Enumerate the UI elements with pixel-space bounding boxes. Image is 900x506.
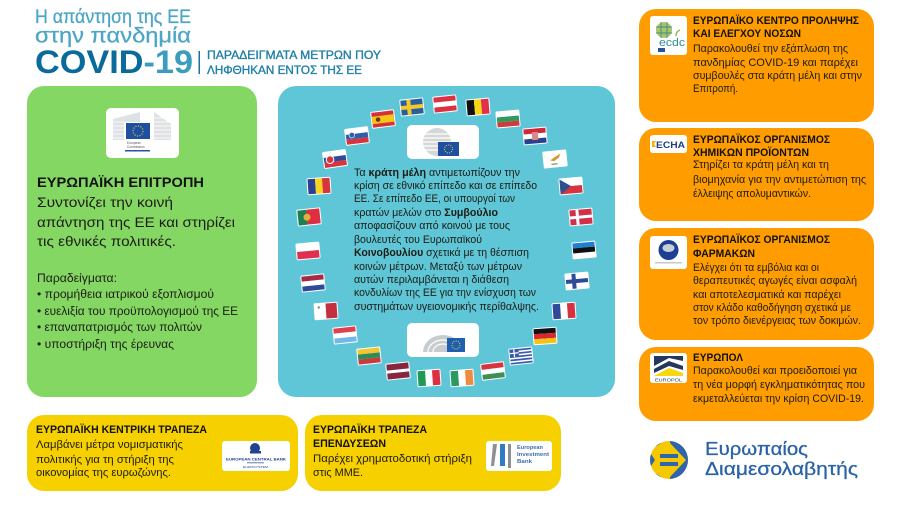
member states text: Κοινοβουλίου σχετικά με τη θέσπιση [354, 247, 529, 259]
flag: Estonia [571, 240, 597, 260]
panel: European Central Bank [27, 415, 298, 491]
member states text [354, 167, 539, 313]
flag: Malta [313, 302, 339, 320]
text: EMA: και αποτελεσματικά και παρέχει [693, 289, 842, 301]
heading: ECDC: ΚΑΙ ΕΛΕΓΧΟΥ ΝΟΣΩΝ [693, 28, 801, 40]
title block [35, 7, 381, 80]
examples list: • προμήθεια ιατρικού εξοπλισμού [37, 287, 214, 301]
panel: European Investment Bank [305, 415, 561, 491]
text: ECB: οικονομίας της ευρωζώνης. [36, 467, 171, 479]
member states text: κρατών μελών στο Συμβούλιο [354, 207, 499, 219]
logo: Europol: EUROPOL [655, 378, 683, 382]
flag: Denmark [568, 207, 594, 227]
flag: Hungary [480, 361, 506, 381]
logo: ECDC [650, 16, 687, 55]
logo: ECDC: ecdc [659, 37, 686, 49]
flag: Slovakia [322, 149, 348, 169]
text: Europol: Παρακολουθεί και προειδοποιεί για [693, 365, 857, 377]
flag: Spain [370, 109, 396, 129]
logo: EIB: European [517, 445, 543, 451]
heading: ECHA: ΕΥΡΩΠΑΪΚΟΣ ΟΡΓΑΝΙΣΜΟΣ [693, 133, 831, 146]
logo: European Commission: Commission [127, 145, 145, 149]
text: ECB: Λαμβάνει μέτρα νομισματικής [36, 439, 183, 451]
examples list: Παραδείγματα: [37, 271, 117, 285]
flag: France [551, 302, 577, 320]
logo: ECHA [650, 135, 687, 153]
title: second line: στην πανδημία [35, 24, 191, 48]
examples list: • ευελιξία του προϋπολογισμού της ΕΕ [37, 304, 238, 318]
text: EIB [313, 453, 472, 479]
flag: Luxembourg [332, 325, 358, 345]
member states text: αποφασίζουν από κοινού με τους [354, 220, 510, 232]
flag: Croatia [522, 126, 548, 146]
member states text: Τα κράτη μέλη αντιμετωπίζουν την [354, 167, 520, 179]
flag: Lithuania [356, 346, 382, 366]
text: ECB: πολιτικής για τη στήριξη της [36, 454, 174, 466]
flag: Poland [295, 241, 321, 261]
examples list [37, 271, 238, 351]
text: ECDC: Επιτροπή. [693, 83, 738, 95]
panel: member states [278, 86, 615, 397]
member states text: συστημάτων υγειονομικής περίθαλψης. [354, 301, 539, 313]
panel: Europol [639, 347, 874, 421]
member states text: κοινών μέτρων. Μεταξύ των μέτρων [354, 261, 522, 273]
logo: EIB [486, 441, 552, 471]
flag: Austria [432, 94, 458, 114]
flag: Cyprus [542, 149, 568, 169]
heading: EMA [693, 233, 831, 260]
text: ECDC: συμβουλές στα κράτη μέλη και στην [693, 70, 862, 82]
flag: Sweden [399, 97, 425, 117]
flag: Romania [306, 177, 332, 195]
logo: ECB [222, 441, 290, 471]
flag: Germany [532, 327, 558, 345]
description: Συντονίζει την κοινή [37, 194, 173, 210]
text: ECB [36, 439, 183, 479]
text: European Ombudsman: Ευρωπαίος [705, 438, 808, 459]
flag: Italy [416, 369, 442, 387]
flag: Czechia [558, 176, 584, 196]
heading: EIB [313, 423, 427, 450]
subtitle: ΠΑΡΑΔΕΙΓΜΑΤΑ ΜΕΤΡΩΝ ΠΟΥ [207, 50, 381, 62]
logo: EIB: Bank [517, 459, 532, 465]
heading: European Commission: ΕΥΡΩΠΑΪΚΗ ΕΠΙΤΡΟΠΗ [37, 174, 204, 190]
text: ECDC: Παρακολουθεί την εξάπλωση της [693, 43, 848, 55]
logo: European Commission [106, 108, 179, 158]
member states text: κρίση σε εθνικό επίπεδο και σε επίπεδο [354, 180, 537, 192]
logo: European Parliament [407, 323, 479, 357]
logo: Council [407, 125, 479, 159]
logo: European Commission: European [127, 141, 141, 145]
flag: Ireland [449, 369, 475, 387]
heading: ECHA [693, 133, 831, 159]
description: απάντηση της ΕΕ και στηρίζει [37, 214, 235, 230]
panel: ECDC [639, 9, 874, 122]
text: EMA: Ελέγχει ότι τα εμβόλια και οι [693, 262, 820, 274]
heading: EIB: ΕΠΕΝΔΥΣΕΩΝ [313, 438, 386, 450]
text: Europol [693, 365, 865, 405]
heading: ECHA: ΧΗΜΙΚΩΝ ΠΡΟΪΟΝΤΩΝ [693, 146, 809, 159]
text: ECHA [693, 159, 866, 200]
European Ombudsman branding [650, 438, 858, 479]
heading: EMA: ΦΑΡΜΑΚΩΝ [693, 248, 755, 260]
examples list: • υποστήριξη της έρευνας [37, 337, 174, 351]
text: EIB: Παρέχει χρηματοδοτική στήριξη [313, 453, 472, 465]
text: Europol: εκμεταλλεύεται την κρίση COVID-19. [693, 393, 864, 405]
text: Europol: τη νέα μορφή εγκληματικότητας που [693, 379, 865, 391]
description: τις εθνικές πολιτικές. [37, 233, 176, 249]
logo: ECHA: ECHA [656, 140, 686, 150]
heading: EMA: ΕΥΡΩΠΑΪΚΟΣ ΟΡΓΑΝΙΣΜΟΣ [693, 233, 831, 246]
text: European Ombudsman [705, 438, 858, 479]
text: EIB: στις ΜΜΕ. [313, 467, 363, 479]
heading: Europol: ΕΥΡΩΠΟΛ [693, 352, 743, 364]
heading: ECDC [693, 14, 860, 40]
member states text: κονδυλίων της ΕΕ για την ενίσχυση των [354, 287, 536, 299]
text: EMA: στον κλάδο καθοδήγηση σχετικά με [693, 302, 851, 314]
text: ECDC: πανδημίας COVID-19 και παρέχει [693, 57, 859, 69]
panel: ECHA [639, 128, 874, 221]
text: ECDC [693, 43, 862, 95]
member states text: ΕΕ. Σε επίπεδο ΕΕ, οι υπουργοί των [354, 193, 515, 205]
flag: Belgium [465, 97, 491, 117]
text: EMA [693, 262, 861, 327]
examples list: • επαναπατρισμός των πολιτών [37, 320, 202, 334]
text: ECHA: έλλειψης απολυμαντικών. [693, 188, 811, 200]
member states text: αυτών περιλαμβάνεται η διάθεση [354, 274, 509, 286]
icon: Ombudsman logo [650, 441, 688, 479]
text: ECHA: Στηρίζει τα κράτη μέλη και τη [693, 159, 829, 171]
description [37, 194, 235, 249]
heading: EIB: ΕΥΡΩΠΑΪΚΗ ΤΡΑΠΕΖΑ [313, 423, 427, 436]
title: first line: Η απάντηση της ΕΕ [35, 7, 191, 28]
flag: Greece [508, 346, 534, 366]
flag: Slovenia [344, 126, 370, 146]
logo: ECB: EUROSYSTEM [243, 465, 269, 469]
flag: Bulgaria [495, 109, 521, 129]
logo: ECB: EUROPEAN CENTRAL BANK [226, 458, 287, 462]
flag: Latvia [385, 361, 411, 381]
text: EMA: τον τρόπο διενέργειας των δοκιμών. [693, 315, 861, 327]
text: ECHA: βιομηχανία για την αντιμετώπιση της [693, 174, 866, 186]
logo: EMA [650, 236, 687, 269]
heading: ECDC: ΕΥΡΩΠΑΪΚΟ ΚΕΝΤΡΟ ΠΡΟΛΗΨΗΣ [693, 14, 860, 27]
text: European Ombudsman: Διαμεσολαβητής [705, 458, 858, 479]
flag: Finland [564, 271, 590, 291]
text: EMA: θεραπευτικές αγωγές είναι ασφαλή [693, 275, 857, 287]
subtitle [207, 50, 381, 77]
flag: Portugal [296, 207, 322, 227]
flag: Netherlands [300, 273, 326, 293]
title: COVID-19: COVID-19 [35, 44, 193, 80]
panel: EMA [639, 228, 874, 340]
member states text: βουλευτές του Ευρωπαϊκού [354, 234, 482, 246]
panel: European Commission [27, 86, 257, 397]
logo: Europol [650, 353, 687, 383]
subtitle: ΛΗΦΘΗΚΑΝ ΕΝΤΟΣ ΤΗΣ ΕΕ [207, 65, 362, 77]
logo: EIB: Investment [517, 452, 549, 458]
heading: ECB: ΕΥΡΩΠΑΪΚΗ ΚΕΝΤΡΙΚΗ ΤΡΑΠΕΖΑ [36, 423, 207, 436]
